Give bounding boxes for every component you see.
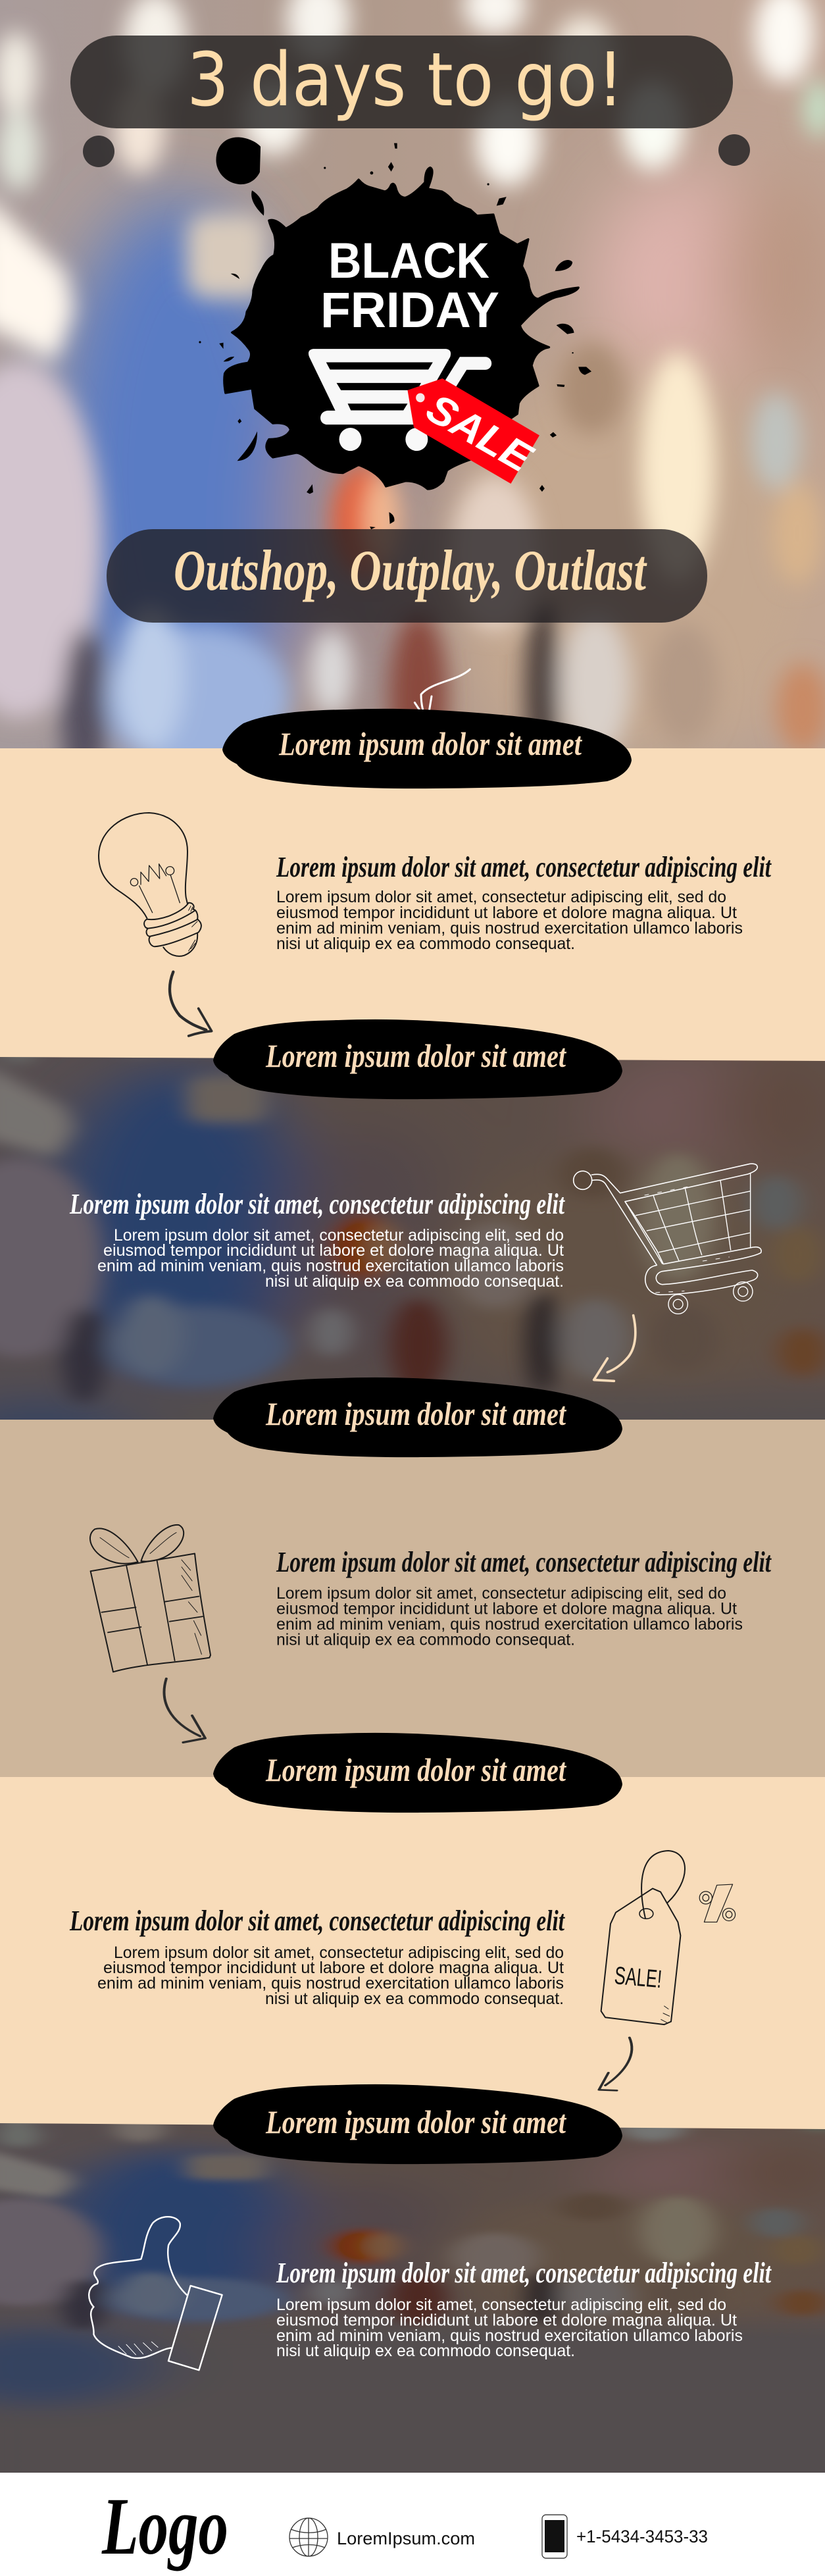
section pill 1: Lorem ipsum dolor sit amet	[278, 725, 583, 762]
section background: cream	[0, 748, 825, 1061]
section background: tan	[0, 1420, 825, 1777]
decorative dot left	[83, 136, 114, 167]
section pill 2	[213, 1019, 622, 1099]
heading block 2	[69, 1188, 565, 1291]
icon: shopping cart	[574, 1164, 761, 1314]
body text 5: Lorem ipsum dolor sit amet, consectetur adipiscing elit, sed do	[276, 2296, 726, 2314]
body text 2: eiusmod tempor incididunt ut labore et dolore magna aliqua. Ut	[103, 1241, 564, 1260]
section pill 1	[222, 709, 632, 788]
body text 1: Lorem ipsum dolor sit amet, consectetur adipiscing elit, sed do	[276, 888, 726, 906]
section background: cream lower	[0, 1777, 825, 2130]
section background: dark photo lower	[0, 2123, 825, 2473]
badge heading	[320, 233, 499, 338]
body text 4	[97, 1944, 564, 2008]
body text 5: eiusmod tempor incididunt ut labore et dolore magna aliqua. Ut	[276, 2311, 737, 2330]
title pill	[70, 36, 733, 128]
body text 4: nisi ut aliquip ex ea commodo consequat.	[265, 1990, 564, 2008]
body text 3: Lorem ipsum dolor sit amet, consectetur adipiscing elit, sed do	[276, 1584, 726, 1603]
body text 2: Lorem ipsum dolor sit amet, consectetur adipiscing elit, sed do	[114, 1226, 564, 1245]
badge heading: BLACK	[328, 233, 489, 289]
black friday badge	[199, 138, 591, 529]
section background: dark photo	[0, 1057, 825, 1420]
phone text: +1-5434-3453-33	[576, 2527, 708, 2546]
section pill 3: Lorem ipsum dolor sit amet	[265, 1395, 567, 1432]
icon: light bulb	[99, 813, 201, 956]
section pill 4	[213, 1733, 622, 1813]
heading block 2: Lorem ipsum dolor sit amet, consectetur adipiscing elit	[69, 1188, 565, 1220]
arrow: cart to pill 3	[594, 1316, 636, 1381]
body text 4: enim ad minim veniam, quis nostrud exercitation ullamco laboris	[97, 1974, 564, 1993]
icon: thumbs up	[89, 2217, 222, 2370]
slogan pill: Outshop, Outplay, Outlast	[174, 539, 647, 603]
decorative dot right	[718, 134, 750, 166]
body text 3: nisi ut aliquip ex ea commodo consequat.	[276, 1631, 575, 1649]
section pill 5: Lorem ipsum dolor sit amet	[265, 2103, 567, 2140]
footer logo: Logo	[101, 2481, 228, 2571]
section pill 3	[213, 1378, 622, 1457]
body text 2: nisi ut aliquip ex ea commodo consequat.	[265, 1272, 564, 1291]
heading block 4	[69, 1905, 565, 2008]
icon: price tag	[601, 1851, 736, 2024]
arrow: tag to pill 5	[599, 2038, 632, 2090]
heading block 3	[276, 1546, 772, 1649]
body text 1: nisi ut aliquip ex ea commodo consequat.	[276, 935, 575, 953]
body text 3	[276, 1584, 743, 1649]
arrow: bulb to pill 2	[170, 972, 212, 1036]
slogan pill	[107, 529, 707, 623]
icon: globe	[289, 2518, 328, 2556]
heading block 1	[276, 851, 772, 953]
body text 2: enim ad minim veniam, quis nostrud exercitation ullamco laboris	[97, 1257, 564, 1275]
heading block 4: Lorem ipsum dolor sit amet, consectetur adipiscing elit	[69, 1905, 565, 1937]
icon: shopping cart with sale tag	[309, 349, 539, 484]
body text 4: eiusmod tempor incididunt ut labore et dolore magna aliqua. Ut	[103, 1959, 564, 1977]
tag label: SALE!	[613, 1962, 663, 1994]
arrow: hero to first pill	[414, 669, 470, 722]
heading block 5	[276, 2257, 772, 2360]
body text 1: enim ad minim veniam, quis nostrud exercitation ullamco laboris	[276, 919, 743, 937]
website text: LoremIpsum.com	[337, 2529, 475, 2548]
icon: phone	[542, 2515, 567, 2558]
body text 1: eiusmod tempor incididunt ut labore et dolore magna aliqua. Ut	[276, 904, 737, 922]
body text 5: enim ad minim veniam, quis nostrud exercitation ullamco laboris	[276, 2327, 743, 2345]
body text 1	[276, 888, 743, 953]
body text 4: Lorem ipsum dolor sit amet, consectetur adipiscing elit, sed do	[114, 1944, 564, 1962]
body text 5	[276, 2296, 743, 2360]
body text 3: enim ad minim veniam, quis nostrud exercitation ullamco laboris	[276, 1615, 743, 1634]
body text 3: eiusmod tempor incididunt ut labore et dolore magna aliqua. Ut	[276, 1599, 737, 1618]
badge heading: FRIDAY	[320, 282, 499, 338]
hero photo background	[0, 0, 825, 1408]
section pill 5	[213, 2084, 622, 2164]
body text 5: nisi ut aliquip ex ea commodo consequat.	[276, 2342, 575, 2360]
sale tag label: SALE	[419, 385, 540, 482]
section pill 4: Lorem ipsum dolor sit amet	[265, 1751, 567, 1788]
section pill 2: Lorem ipsum dolor sit amet	[265, 1037, 567, 1074]
title pill: 3 days to go!	[187, 38, 624, 123]
icon: gift box	[90, 1525, 211, 1672]
body text 2	[97, 1226, 564, 1291]
arrow: gift to pill 4	[164, 1679, 205, 1742]
